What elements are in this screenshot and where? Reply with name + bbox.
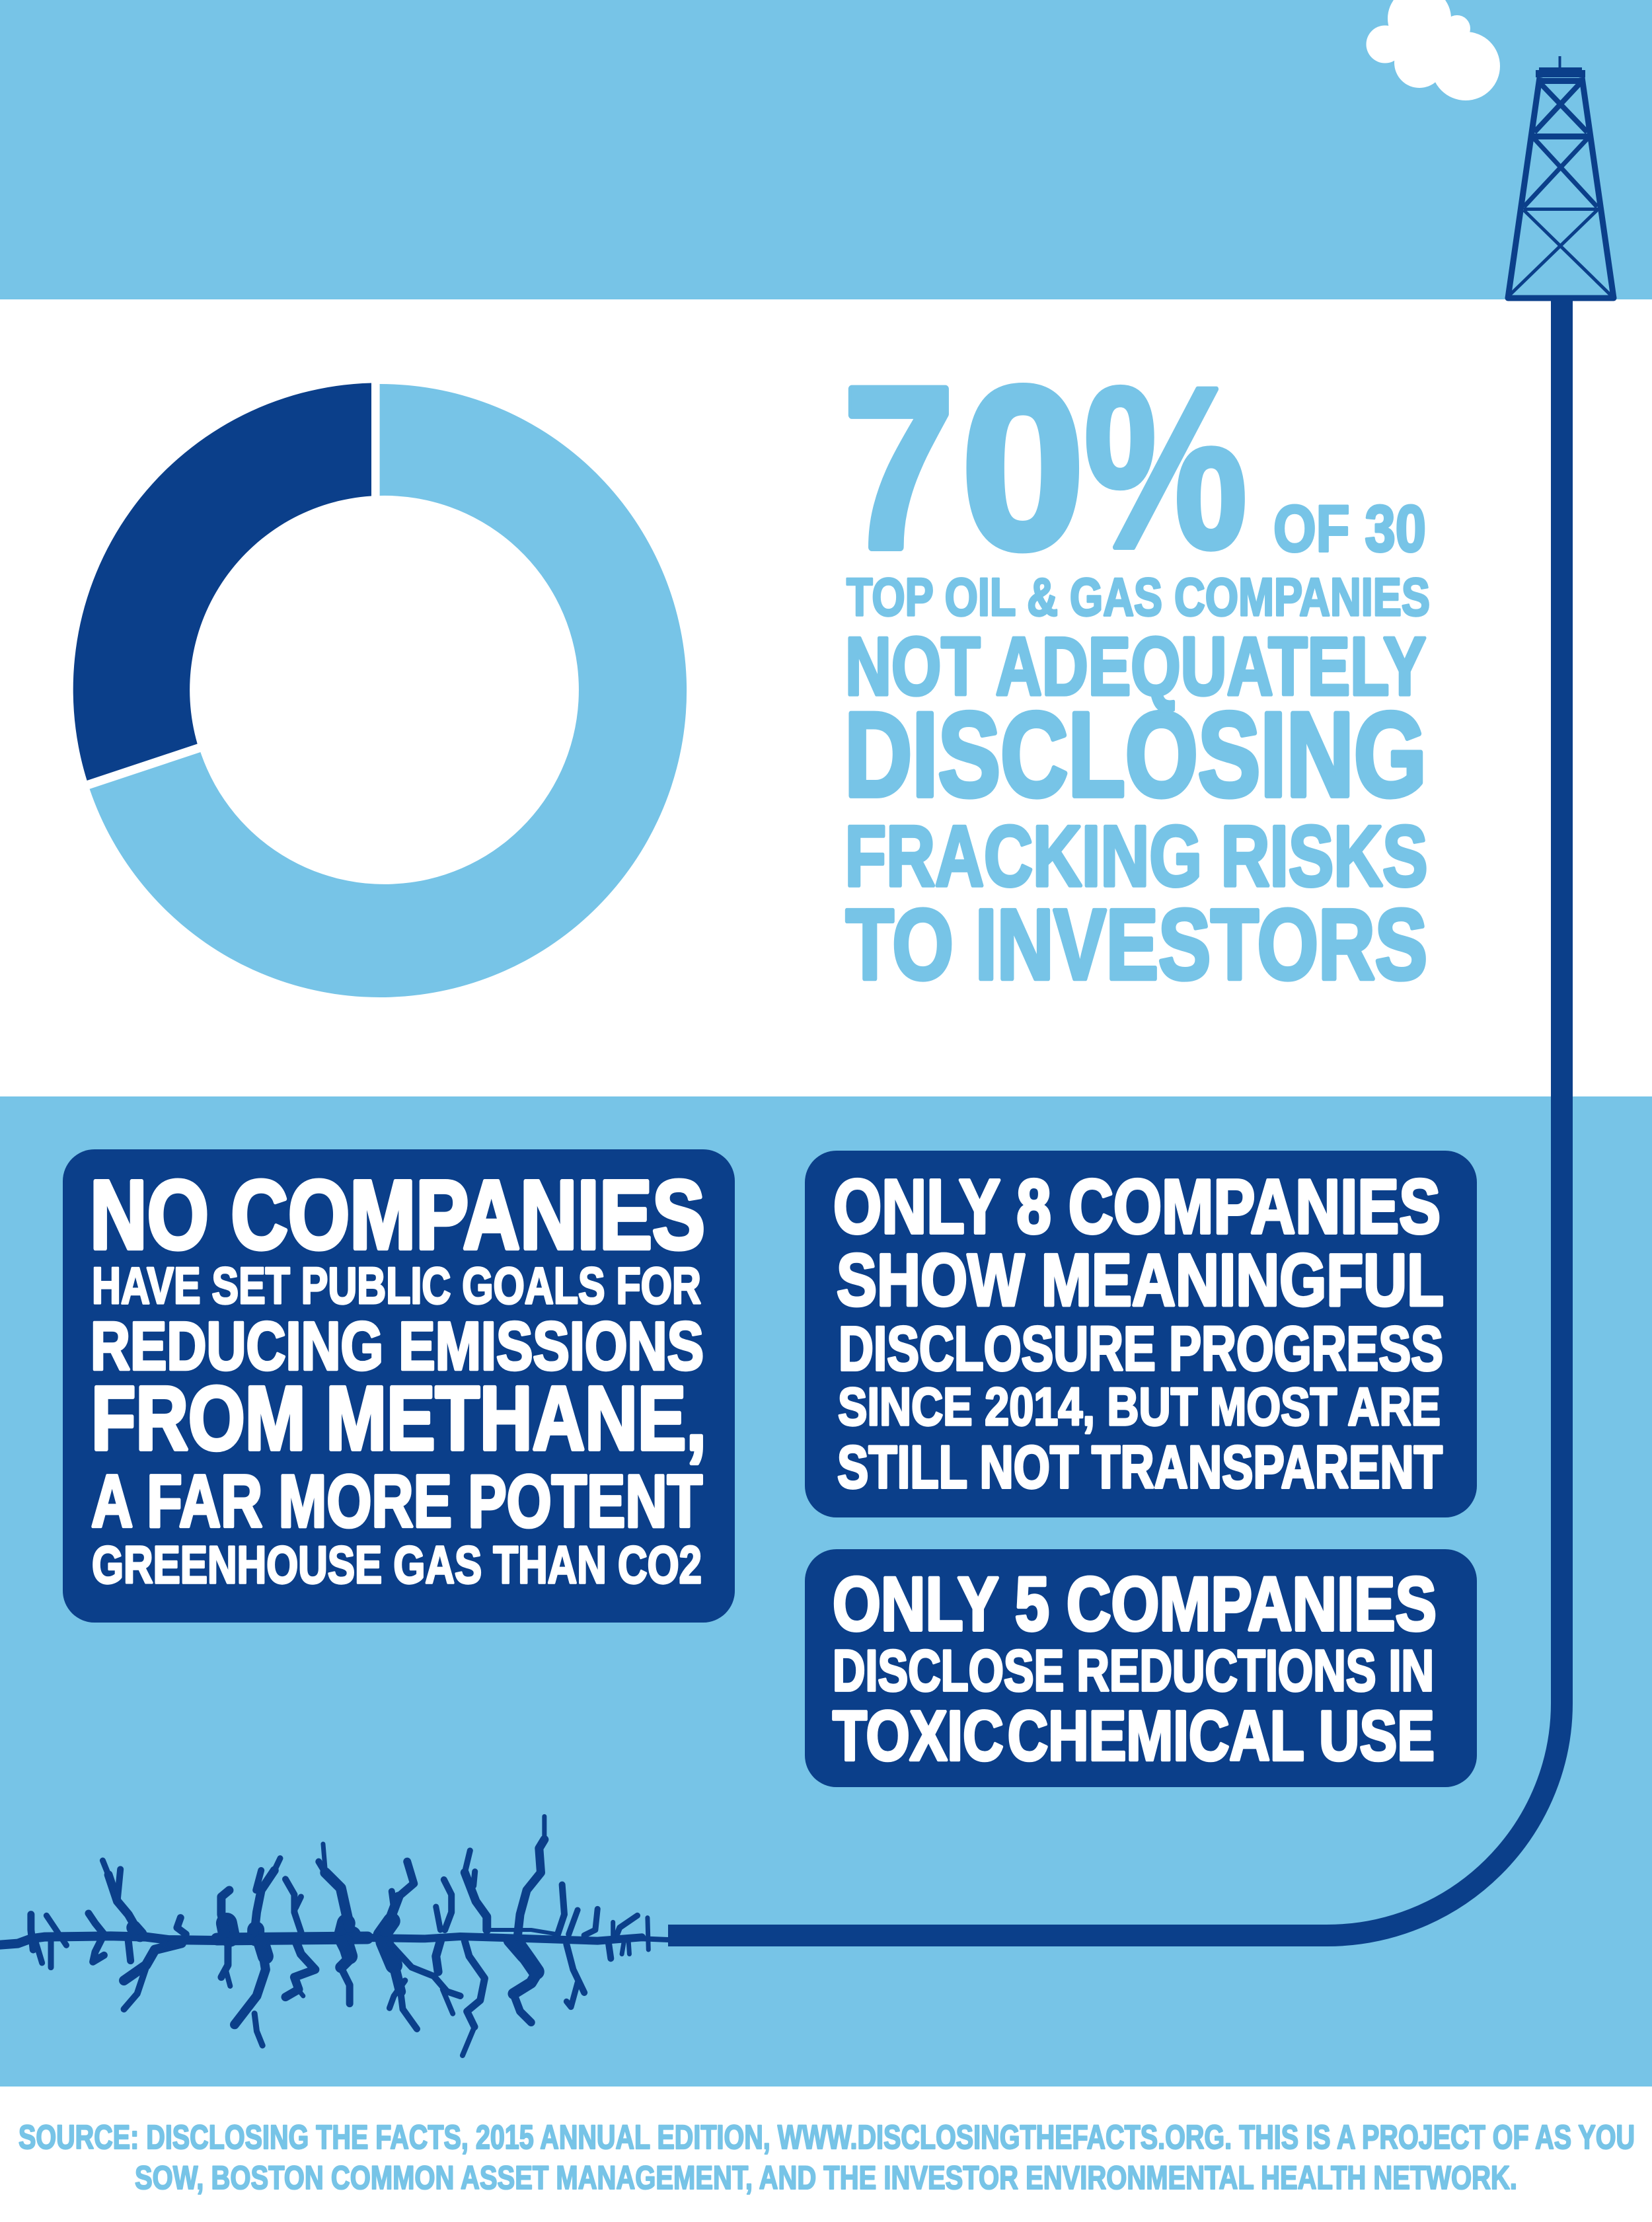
panel text: disclosure progress: SHOW MEANINGFUL — [837, 1239, 1444, 1321]
headline stat: 70% of 30 top oil and gas companies: TOP OIL & GAS COMPANIES — [846, 568, 1430, 627]
donut chart — [73, 383, 687, 997]
sky band — [0, 0, 1652, 299]
panel text: methane goals: GREENHOUSE GAS THAN CO2 — [92, 1535, 702, 1594]
panel: only 8 companies — [805, 1151, 1477, 1517]
panel: only 5 companies — [805, 1549, 1477, 1787]
headline stat: 70% of 30 top oil and gas companies: OF 30 — [1273, 492, 1426, 565]
panel text: toxic chemicals: DISCLOSE REDUCTIONS IN — [833, 1638, 1434, 1703]
panel text: toxic chemicals — [833, 1562, 1437, 1775]
dark segment: 30% — [73, 383, 371, 781]
panel text: disclosure progress: STILL NOT TRANSPARENT — [837, 1434, 1443, 1501]
pipeline — [668, 299, 1562, 1935]
panel text: methane goals: NO COMPANIES — [90, 1161, 705, 1270]
panel text: methane goals: HAVE SET PUBLIC GOALS FOR — [92, 1256, 701, 1315]
panel text: disclosure progress — [833, 1163, 1444, 1501]
panel text: methane goals — [90, 1161, 706, 1594]
headline stat: 70% of 30 top oil and gas companies — [843, 339, 1430, 1000]
panel text: methane goals: REDUCING EMISSIONS — [91, 1308, 704, 1384]
icon: drilling derrick — [1508, 56, 1614, 298]
panel text: disclosure progress: SINCE 2014, BUT MOST ARE — [838, 1377, 1441, 1437]
panel text: disclosure progress: DISCLOSURE PROGRESS — [839, 1314, 1443, 1384]
headline stat: 70% of 30 top oil and gas companies: TO INVESTORS — [846, 888, 1427, 1000]
headline stat: 70% of 30 top oil and gas companies: 7 — [843, 339, 954, 596]
panel text: disclosure progress: ONLY 8 COMPANIES — [833, 1163, 1441, 1249]
panel text: toxic chemicals: ONLY 5 COMPANIES — [833, 1562, 1437, 1647]
icon: cloud — [1367, 0, 1500, 100]
headline stat: 70% of 30 top oil and gas companies: FRACKING RISKS — [845, 808, 1427, 904]
icon: underground fractures — [0, 1816, 668, 2055]
headline stat: 70% of 30 top oil and gas companies: NOT ADEQUATELY — [845, 621, 1426, 712]
headline stat: 70% of 30 top oil and gas companies: % — [1084, 339, 1248, 596]
ground panel — [0, 1096, 1652, 2087]
panel text: methane goals: FROM METHANE, — [91, 1368, 706, 1469]
panel: no companies — [63, 1149, 735, 1623]
headline stat: 70% of 30 top oil and gas companies: DISCLOSING — [845, 688, 1427, 822]
panel text: toxic chemicals: TOXIC CHEMICAL USE — [833, 1696, 1435, 1775]
source note — [19, 2118, 1635, 2196]
panel text: methane goals: A FAR MORE POTENT — [91, 1460, 702, 1543]
white stat panel — [0, 299, 1652, 1096]
light segment: 70% — [90, 384, 687, 997]
headline stat: 70% of 30 top oil and gas companies: 0 — [961, 339, 1084, 596]
